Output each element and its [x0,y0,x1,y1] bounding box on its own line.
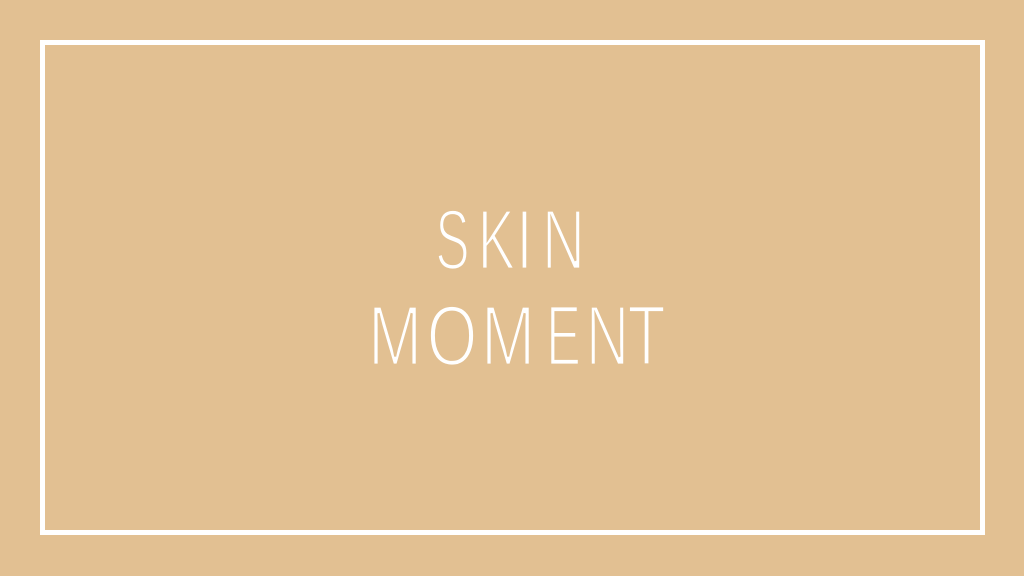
title line 2: MOMENT: T [627,287,666,383]
title line 2: MOMENT: O [427,288,477,384]
title line 1: SKIN: I [516,191,533,288]
title line 2: MOMENT: M [368,288,422,384]
title line 2: MOMENT: M [481,288,535,384]
title line 1: SKIN: K [478,192,515,288]
title line 2: MOMENT: E [546,289,581,384]
title line 1: SKIN: N [542,191,585,288]
title: Skin Moment [368,191,666,384]
title line 1: SKIN [435,191,585,288]
title line 1: SKIN: S [435,191,470,287]
title line 2: MOMENT [368,287,666,384]
white frame [42,42,982,532]
title line 2: MOMENT: N [586,287,629,384]
